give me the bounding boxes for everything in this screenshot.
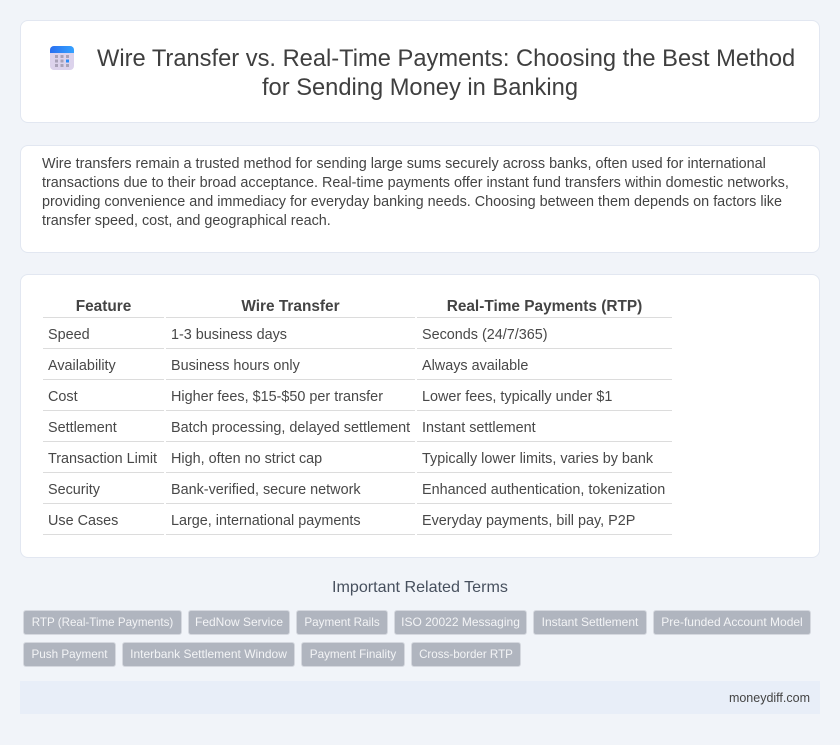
- tag: FedNow Service: [195, 615, 283, 629]
- row: speed: Speed: [48, 327, 90, 343]
- related terms tags: [23, 610, 811, 667]
- tag: [23, 642, 116, 667]
- row: settlement: Batch processing, delayed settlement: [171, 420, 410, 436]
- title: [97, 46, 795, 101]
- row: cost: Higher fees, $15-$50 per transfer: [171, 389, 383, 405]
- row: settlement: [48, 420, 536, 436]
- row: cost: Cost: [48, 389, 78, 405]
- description text: providing convenience and immediacy for everyday banking needs. Choosing between them depends on factors like: [42, 194, 782, 210]
- tag: RTP (Real-Time Payments): [32, 616, 173, 629]
- title: Wire Transfer vs. Real-Time Payments: Choosing the Best Method: [97, 46, 795, 72]
- description text: transactions due to their broad acceptance. Real-time payments offer instant fund transfers within domestic networks,: [42, 175, 789, 191]
- column headings: Real-Time Payments (RTP): [447, 298, 642, 315]
- row: settlement: Instant settlement: [422, 420, 536, 436]
- tag: [653, 610, 811, 635]
- row: availability: [48, 358, 528, 374]
- tag: [188, 610, 290, 635]
- description text: transfer speed, cost, and geographical reach.: [42, 213, 331, 229]
- icon: calendar: [50, 46, 74, 70]
- row: transaction limit: [48, 451, 653, 467]
- tag: [411, 642, 521, 667]
- tag: Push Payment: [31, 648, 108, 661]
- tag: [301, 642, 405, 667]
- footer source: moneydiff.com: [729, 691, 810, 705]
- row: transaction limit: Transaction Limit: [48, 451, 157, 467]
- row: settlement: Settlement: [48, 420, 117, 436]
- tag: [533, 610, 647, 635]
- tag: [296, 610, 388, 635]
- tag: ISO 20022 Messaging: [401, 615, 520, 629]
- row: speed: 1-3 business days: [171, 327, 287, 343]
- row: security: Security: [48, 482, 100, 498]
- column headings: [76, 298, 642, 315]
- row: availability: Availability: [48, 358, 116, 374]
- tag: [122, 642, 295, 667]
- related terms heading: Important Related Terms: [332, 578, 508, 596]
- comparison table: [43, 298, 672, 535]
- column headings: Wire Transfer: [241, 298, 340, 315]
- tag: Instant Settlement: [542, 615, 638, 629]
- row: availability: Always available: [422, 358, 528, 374]
- row: use cases: Everyday payments, bill pay, P2P: [422, 513, 635, 529]
- row: use cases: Large, international payments: [171, 513, 361, 529]
- row: security: [48, 482, 665, 498]
- tag: [23, 610, 182, 635]
- row: cost: Lower fees, typically under $1: [422, 389, 612, 405]
- panel: description: [20, 145, 820, 253]
- row: availability: Business hours only: [171, 358, 300, 374]
- tag: Payment Rails: [304, 616, 380, 629]
- panel: header: [20, 20, 820, 123]
- row: security: Bank-verified, secure network: [171, 482, 361, 498]
- tag: Interbank Settlement Window: [130, 647, 287, 661]
- panel: comparison table: [20, 274, 820, 558]
- tag: [394, 610, 527, 635]
- row: speed: Seconds (24/7/365): [422, 327, 548, 343]
- row: transaction limit: Typically lower limits, varies by bank: [422, 451, 653, 467]
- tag: Payment Finality: [310, 648, 396, 661]
- tag: Cross-border RTP: [419, 648, 513, 661]
- row: speed: [48, 327, 548, 343]
- description text: Wire transfers remain a trusted method for sending large sums securely across banks, often used for international: [42, 156, 766, 172]
- tag: Pre-funded Account Model: [661, 615, 803, 629]
- title: for Sending Money in Banking: [262, 75, 578, 101]
- row: cost: [48, 389, 612, 405]
- column headings: Feature: [76, 298, 131, 315]
- footer: [20, 681, 820, 714]
- row: use cases: Use Cases: [48, 513, 118, 529]
- description text: [42, 156, 789, 229]
- row: use cases: [48, 513, 635, 529]
- row: security: Enhanced authentication, tokenization: [422, 482, 665, 498]
- row: transaction limit: High, often no strict cap: [171, 451, 322, 467]
